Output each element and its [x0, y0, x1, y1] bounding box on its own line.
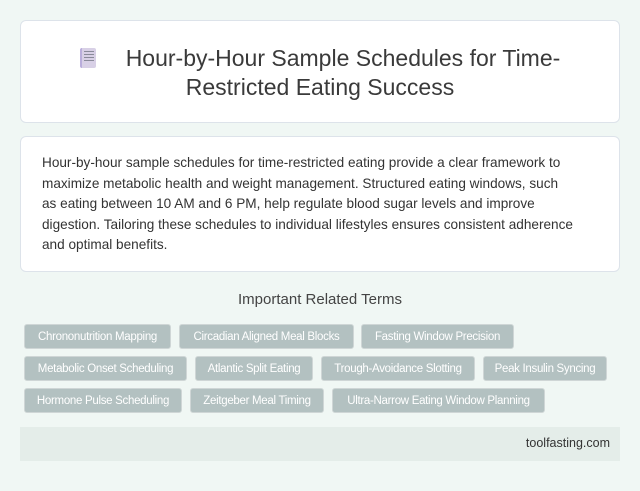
title: Hour-by-Hour Sample Schedules for Time-Restricted Eating Success	[126, 45, 560, 100]
tags: Atlantic Split Eating	[208, 363, 300, 375]
heading: related terms: Important Related Terms	[238, 291, 402, 308]
tags: Zeitgeber Meal Timing	[203, 395, 311, 407]
tags: Fasting Window Precision	[375, 331, 500, 343]
tags: Hormone Pulse Scheduling	[37, 395, 169, 407]
description card	[20, 136, 620, 272]
footer text: toolfasting.com	[526, 436, 610, 450]
tags: Ultra-Narrow Eating Window Planning	[347, 395, 530, 407]
footer	[20, 427, 620, 461]
tags: Chrononutrition Mapping	[38, 331, 157, 343]
tags: Trough-Avoidance Slotting	[334, 363, 462, 375]
description text: Hour-by-hour sample schedules for time-restricted eating provide a clear framework to maximize metabolic health and weight management. Structured eating windows, such as eating between 10 AM and 6 PM, help regulate blood sugar levels and improve digestion. Tailoring these schedules to individual lifestyles ensures consistent adherence and optimal benefits.	[42, 155, 573, 252]
title card	[20, 20, 620, 123]
tags: Peak Insulin Syncing	[495, 363, 595, 375]
tags: Metabolic Onset Scheduling	[38, 363, 173, 375]
tags: Circadian Aligned Meal Blocks	[194, 331, 340, 343]
